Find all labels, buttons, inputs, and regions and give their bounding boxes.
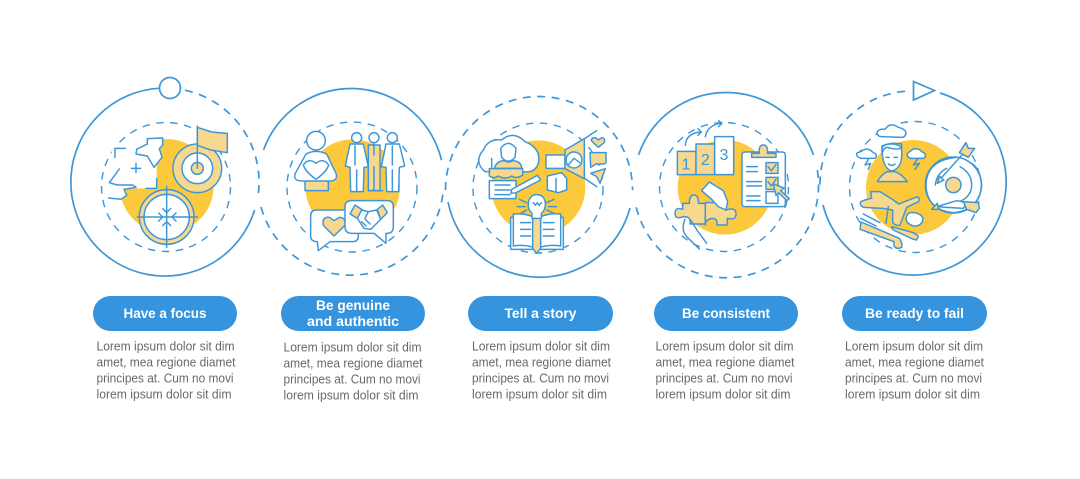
body text 4: principes at. Cum no movi xyxy=(656,372,792,386)
body text 3: amet, mea regione diamet xyxy=(472,356,611,370)
body text 4 xyxy=(656,340,795,402)
ring xyxy=(636,92,819,278)
pill heading: tell a story: Tell a story xyxy=(504,306,577,321)
panel: tell a story xyxy=(446,97,632,402)
body text 2: lorem ipsum dolor sit dim xyxy=(284,388,418,402)
body text 2: principes at. Cum no movi xyxy=(284,372,420,386)
pill heading: be consistent xyxy=(654,296,798,331)
body text 5: amet, mea regione diamet xyxy=(845,356,984,370)
panel: be ready to fail xyxy=(820,82,1006,402)
body text 1: principes at. Cum no movi xyxy=(96,372,234,386)
icon: podium, puzzle and checklist: 2 xyxy=(701,152,710,169)
body text 3: principes at. Cum no movi xyxy=(472,372,609,386)
icon: podium, puzzle and checklist xyxy=(675,121,789,249)
panel: have a focus xyxy=(71,78,259,402)
ring with start circle xyxy=(71,78,259,276)
body text 3: lorem ipsum dolor sit dim xyxy=(472,388,607,402)
body text 3: Lorem ipsum dolor sit dim xyxy=(472,340,610,354)
body text 1: Lorem ipsum dolor sit dim xyxy=(96,340,234,354)
pill heading: be genuine and authentic xyxy=(281,296,425,331)
panel: be consistent xyxy=(636,92,819,402)
body text 1: lorem ipsum dolor sit dim xyxy=(96,388,232,402)
body text 4: lorem ipsum dolor sit dim xyxy=(656,388,790,402)
ring with end arrow xyxy=(820,82,1006,275)
ring xyxy=(446,97,632,277)
body text 5: Lorem ipsum dolor sit dim xyxy=(845,340,983,354)
body text 4: Lorem ipsum dolor sit dim xyxy=(656,340,794,354)
icon: falling person, target and calm face xyxy=(857,125,982,248)
pill heading: be ready to fail: Be ready to fail xyxy=(865,306,964,321)
pill heading: have a focus xyxy=(93,296,237,331)
pill heading: be ready to fail xyxy=(842,296,987,331)
body text 4: amet, mea regione diamet xyxy=(656,356,795,370)
icon: podium, puzzle and checklist: 3 xyxy=(720,147,729,164)
body text 5: principes at. Cum no movi xyxy=(845,372,982,386)
pill heading: be genuine and authentic: and authentic xyxy=(307,314,400,329)
icon: storyteller, megaphone and book xyxy=(479,131,606,253)
panel: be genuine and authentic xyxy=(261,88,443,402)
body text 3 xyxy=(472,340,611,402)
body text 2: Lorem ipsum dolor sit dim xyxy=(284,340,422,354)
body text 1 xyxy=(96,340,236,402)
pill heading: have a focus: Have a focus xyxy=(124,306,206,321)
body text 2: amet, mea regione diamet xyxy=(284,356,423,370)
pill heading: be genuine and authentic: Be genuine xyxy=(316,298,390,313)
body text 5 xyxy=(845,340,984,402)
pill heading: be consistent: Be consistent xyxy=(682,306,770,321)
body text 5: lorem ipsum dolor sit dim xyxy=(845,388,980,402)
icon: people, heart and handshake xyxy=(295,131,405,251)
ring xyxy=(261,88,443,275)
body text 2 xyxy=(284,340,423,402)
body text 1: amet, mea regione diamet xyxy=(96,356,236,370)
icon: podium, puzzle and checklist: 1 xyxy=(682,156,691,173)
pill heading: tell a story xyxy=(468,296,613,331)
icon: focus target and frame xyxy=(109,126,227,247)
